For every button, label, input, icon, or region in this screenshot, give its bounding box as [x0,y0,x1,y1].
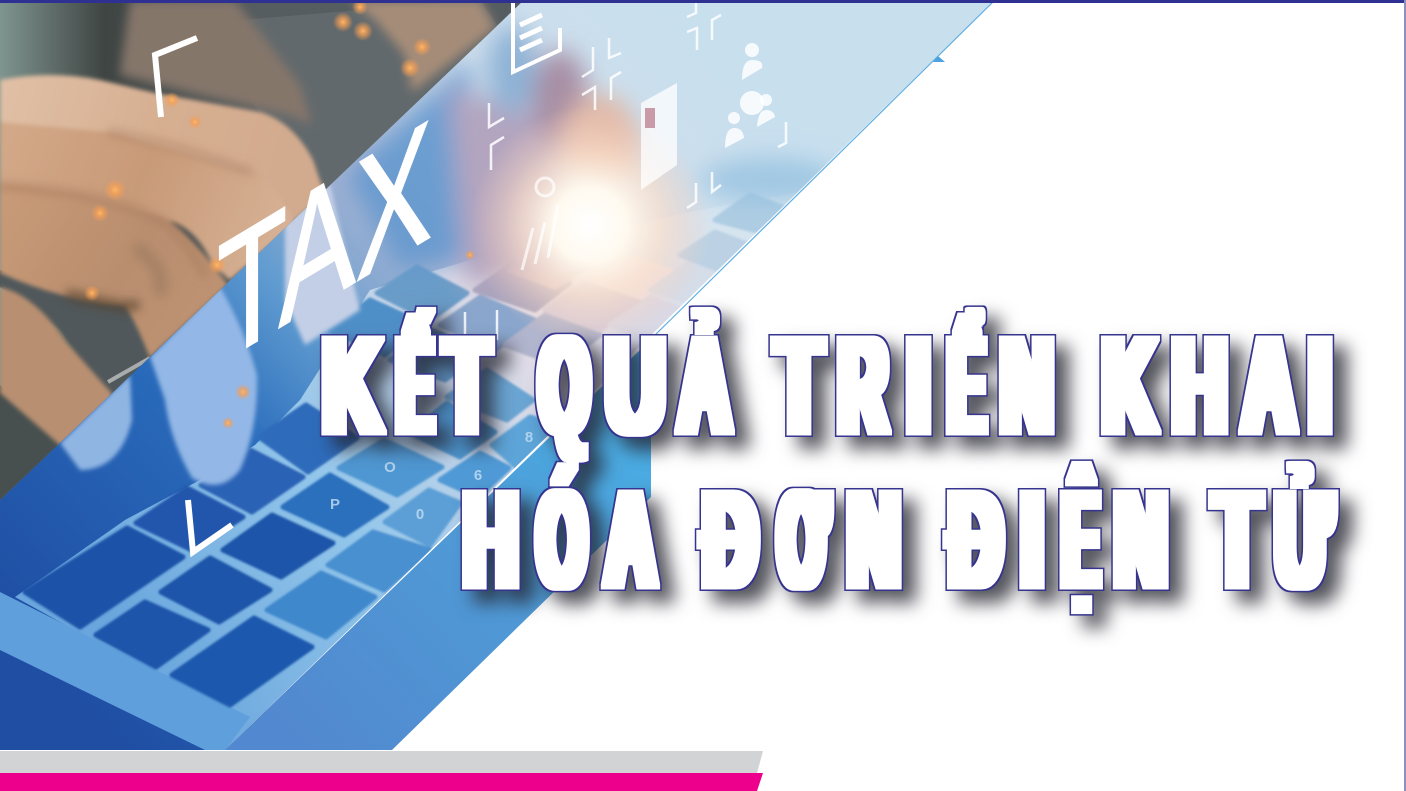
key legends: 8 [525,429,533,446]
title: K [323,309,381,463]
title: N [848,463,900,617]
title: K [1103,309,1156,463]
silver laptop edge [108,358,150,382]
key legends: P [330,496,340,513]
central light flare [478,118,699,336]
blurred upper hand [120,0,312,125]
key legends [330,429,533,523]
natural colour hands area [0,0,530,505]
blurred right hand [350,0,495,92]
title: T [1214,463,1260,617]
title: Ơ [779,463,828,617]
title: U [606,309,664,463]
top border [0,0,1406,3]
title: H [1173,309,1226,463]
title: Đ [703,463,757,617]
key legends: 0 [416,506,424,523]
photo: hands typing on laptop keyboard [0,0,1000,750]
photo tint base [0,0,1000,750]
icon: dollar chart [522,178,558,270]
orange light dots [84,0,475,429]
title: N [1115,463,1166,617]
top finger [0,75,325,225]
bottom grey stripe [0,751,763,773]
second finger [0,122,295,280]
title: Ế [398,309,432,463]
keyboard bed [15,190,810,750]
title: N [1001,309,1052,463]
light blue diagonal band [225,339,651,750]
blurred fingers over keyboard [60,184,360,485]
title: I [907,309,930,463]
title [323,309,1332,617]
large corner brackets [155,38,232,552]
key legends: 6 [474,467,482,484]
title: I [1021,463,1043,617]
laptop front edge [0,592,250,750]
fourth finger [0,287,115,447]
keyboard keys [25,195,790,705]
title: Ể [949,309,984,463]
small corner brackets [465,0,786,340]
blurred lilac glow behind fingers [345,25,840,285]
icon: profile sheet [641,83,677,190]
title: A [1243,309,1295,463]
key legends: O [384,459,396,476]
dark background [0,0,530,505]
title: T [776,309,822,463]
third finger [0,183,228,358]
right border [1404,0,1406,791]
title: I [1309,309,1331,463]
title: Ả [679,309,730,463]
finger shading [0,132,250,306]
title: Đ [949,463,1002,617]
title: Ệ [1063,463,1098,617]
title: A [606,463,655,617]
bottom magenta stripe [0,773,763,791]
infographic cover: Ử [1276,463,1332,617]
small blue nib on edge [933,56,945,62]
dark corner at lower left [0,385,64,500]
title: R [839,309,886,463]
fingers group [0,75,325,358]
grey laptop under fingers [0,270,160,400]
title: T [445,309,489,463]
TAX lettering: TAX [217,83,432,402]
title: Ó [538,463,586,617]
grey laptop [252,10,497,189]
photo edge line [650,0,995,340]
icon: people and globe [725,43,775,148]
title: H [464,463,518,617]
title: Q [540,309,588,463]
icon: document [513,0,560,72]
